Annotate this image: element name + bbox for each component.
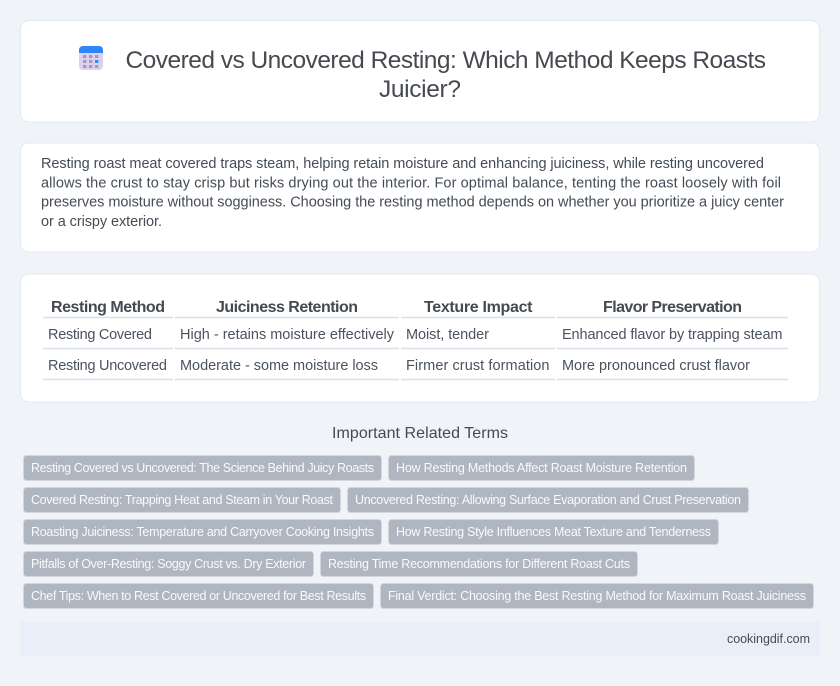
table row: resting covered: Enhanced flavor by trapping steam bbox=[562, 327, 782, 343]
tag bbox=[388, 520, 718, 544]
footer source: cookingdif.com bbox=[727, 632, 810, 646]
summary text block: allows the crust to stay crisp but risks drying out the interior. For optimal balance, tenting the roast loosely with foil bbox=[41, 175, 781, 191]
panel: summary bbox=[20, 143, 820, 252]
icon: calendar bbox=[79, 46, 103, 70]
tag bbox=[348, 488, 748, 512]
tag: Uncovered Resting: Allowing Surface Evaporation and Crust Preservation bbox=[355, 493, 741, 507]
title bbox=[126, 47, 766, 103]
summary text block bbox=[41, 156, 784, 230]
tag bbox=[24, 520, 382, 544]
tag bbox=[24, 584, 374, 608]
summary text block: Resting roast meat covered traps steam, helping retain moisture and enhancing juiciness, while resting uncovered bbox=[41, 156, 764, 172]
summary text block: preserves moisture without sogginess. Choosing the resting method depends on whether you prioritize a juicy center bbox=[41, 195, 784, 211]
tag bbox=[380, 584, 814, 608]
table row: resting uncovered: Firmer crust formation bbox=[406, 358, 550, 374]
tag: Chef Tips: When to Rest Covered or Uncovered for Best Results bbox=[31, 589, 366, 603]
tag: Covered Resting: Trapping Heat and Steam in Your Roast bbox=[31, 493, 334, 507]
tag: Final Verdict: Choosing the Best Resting Method for Maximum Roast Juiciness bbox=[388, 589, 806, 603]
tag: Resting Covered vs Uncovered: The Science Behind Juicy Roasts bbox=[31, 461, 374, 475]
tag: How Resting Style Influences Meat Texture and Tenderness bbox=[396, 525, 711, 539]
table row: resting uncovered: More pronounced crust flavor bbox=[562, 358, 750, 374]
tag: Pitfalls of Over-Resting: Soggy Crust vs. Dry Exterior bbox=[31, 557, 306, 571]
title: Juicier? bbox=[379, 76, 461, 103]
footer bbox=[20, 622, 820, 656]
tag bbox=[24, 456, 382, 480]
tag: Resting Time Recommendations for Different Roast Cuts bbox=[328, 557, 630, 571]
tag bbox=[24, 552, 314, 576]
panel: related term tags bbox=[24, 456, 814, 608]
table header row: Flavor Preservation bbox=[603, 299, 742, 316]
table header row: Juiciness Retention bbox=[216, 299, 358, 316]
summary text block: or a crispy exterior. bbox=[41, 214, 162, 230]
table row: resting uncovered bbox=[48, 358, 750, 374]
tag: Roasting Juiciness: Temperature and Carryover Cooking Insights bbox=[31, 525, 374, 539]
tag bbox=[320, 552, 638, 576]
table header row bbox=[51, 299, 742, 316]
heading: important related terms: Important Related Terms bbox=[332, 425, 508, 442]
table row: resting covered: Moist, tender bbox=[406, 327, 489, 343]
title: Covered vs Uncovered Resting: Which Method Keeps Roasts bbox=[126, 47, 766, 74]
panel: comparison table bbox=[20, 274, 820, 402]
table header row: Texture Impact bbox=[424, 299, 533, 316]
table row: resting covered bbox=[48, 327, 782, 343]
table row: resting covered: High - retains moisture effectively bbox=[180, 327, 395, 343]
table row: resting uncovered: Resting Uncovered bbox=[48, 358, 167, 374]
tag: How Resting Methods Affect Roast Moisture Retention bbox=[396, 461, 687, 475]
tag bbox=[388, 456, 694, 480]
tag bbox=[24, 488, 340, 512]
table row: resting covered: Resting Covered bbox=[48, 327, 152, 343]
table row: resting uncovered: Moderate - some moisture loss bbox=[180, 358, 378, 374]
panel: header bbox=[20, 20, 820, 122]
table header row: Resting Method bbox=[51, 299, 165, 316]
